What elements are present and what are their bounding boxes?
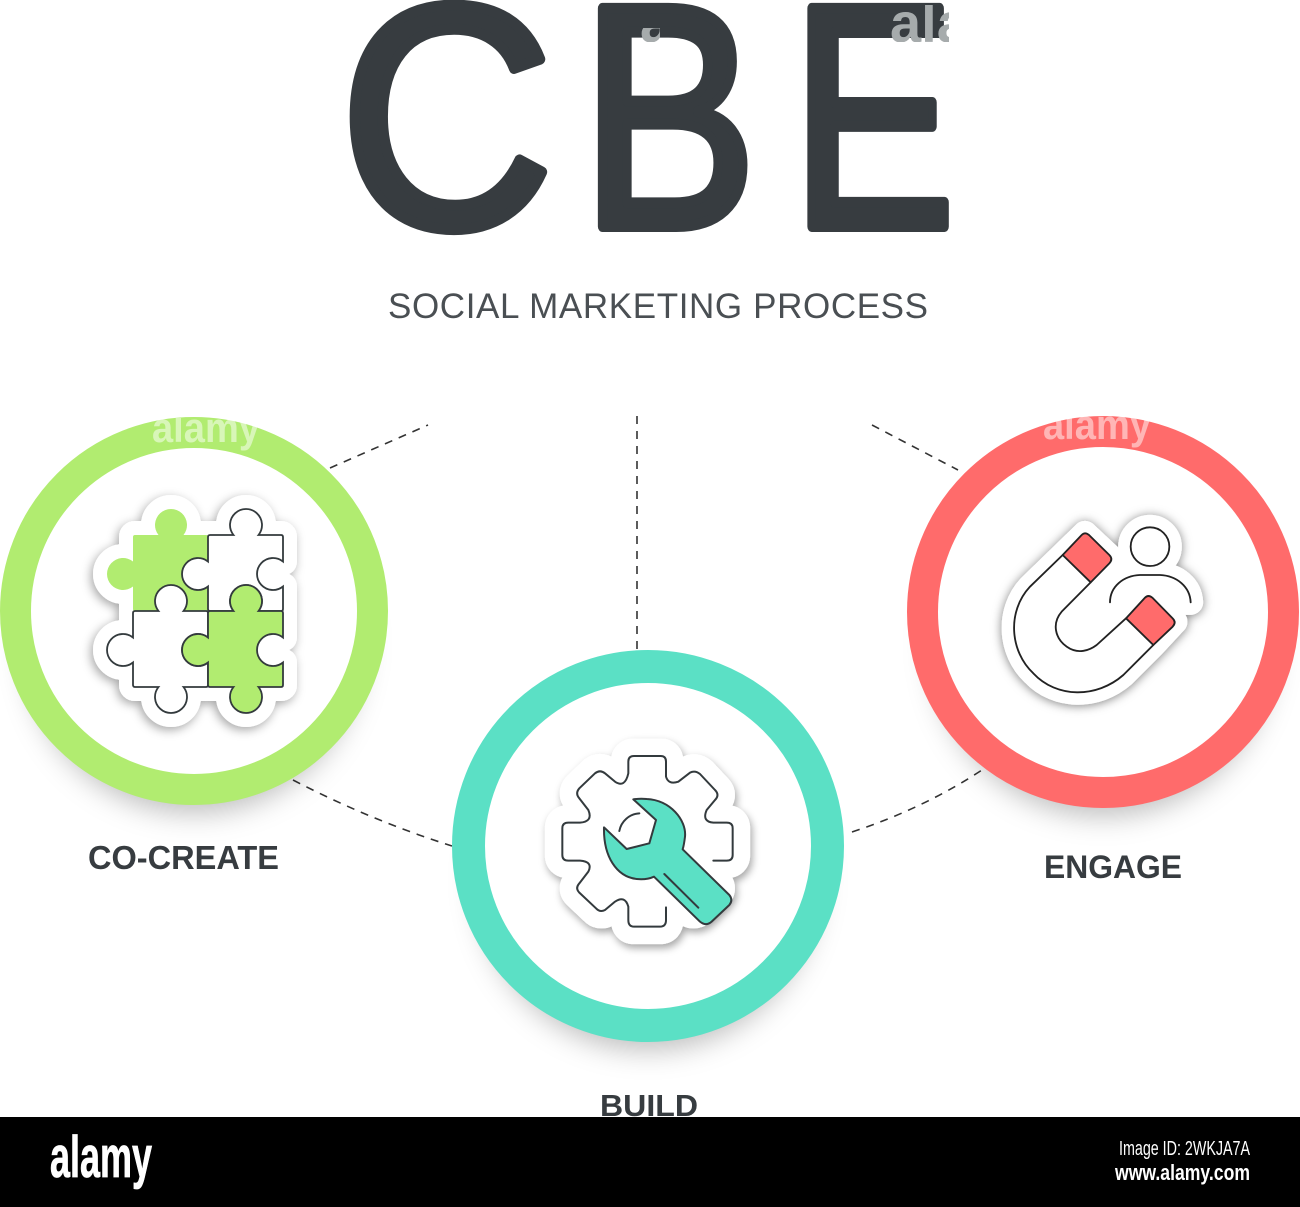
label: co-create: CO-CREATE [88,839,279,876]
watermarks: alamy [1043,401,1152,448]
label: engage: ENGAGE [1044,849,1182,885]
subtitle: SOCIAL MARKETING PROCESS [388,287,928,326]
circle: co-create [16,432,372,813]
footer image id: Image ID: 2WKJA7A [1119,1138,1250,1160]
circle: engage [922,432,1284,816]
footer bar [0,1117,1300,1207]
circle: build [468,666,828,1050]
label: build: BUILD [600,1088,698,1123]
dashed connectors [293,416,985,846]
title watermarks [642,5,949,42]
title: CBE [340,0,955,294]
watermarks: alamy [152,404,261,451]
watermarks [153,416,1150,450]
icon: gear and wrench [562,756,733,927]
footer url: www.alamy.com [1114,1160,1250,1185]
icon: puzzle pieces [107,509,284,713]
footer logo: alamy [50,1125,152,1190]
icon: magnet attracting person [1014,527,1191,692]
